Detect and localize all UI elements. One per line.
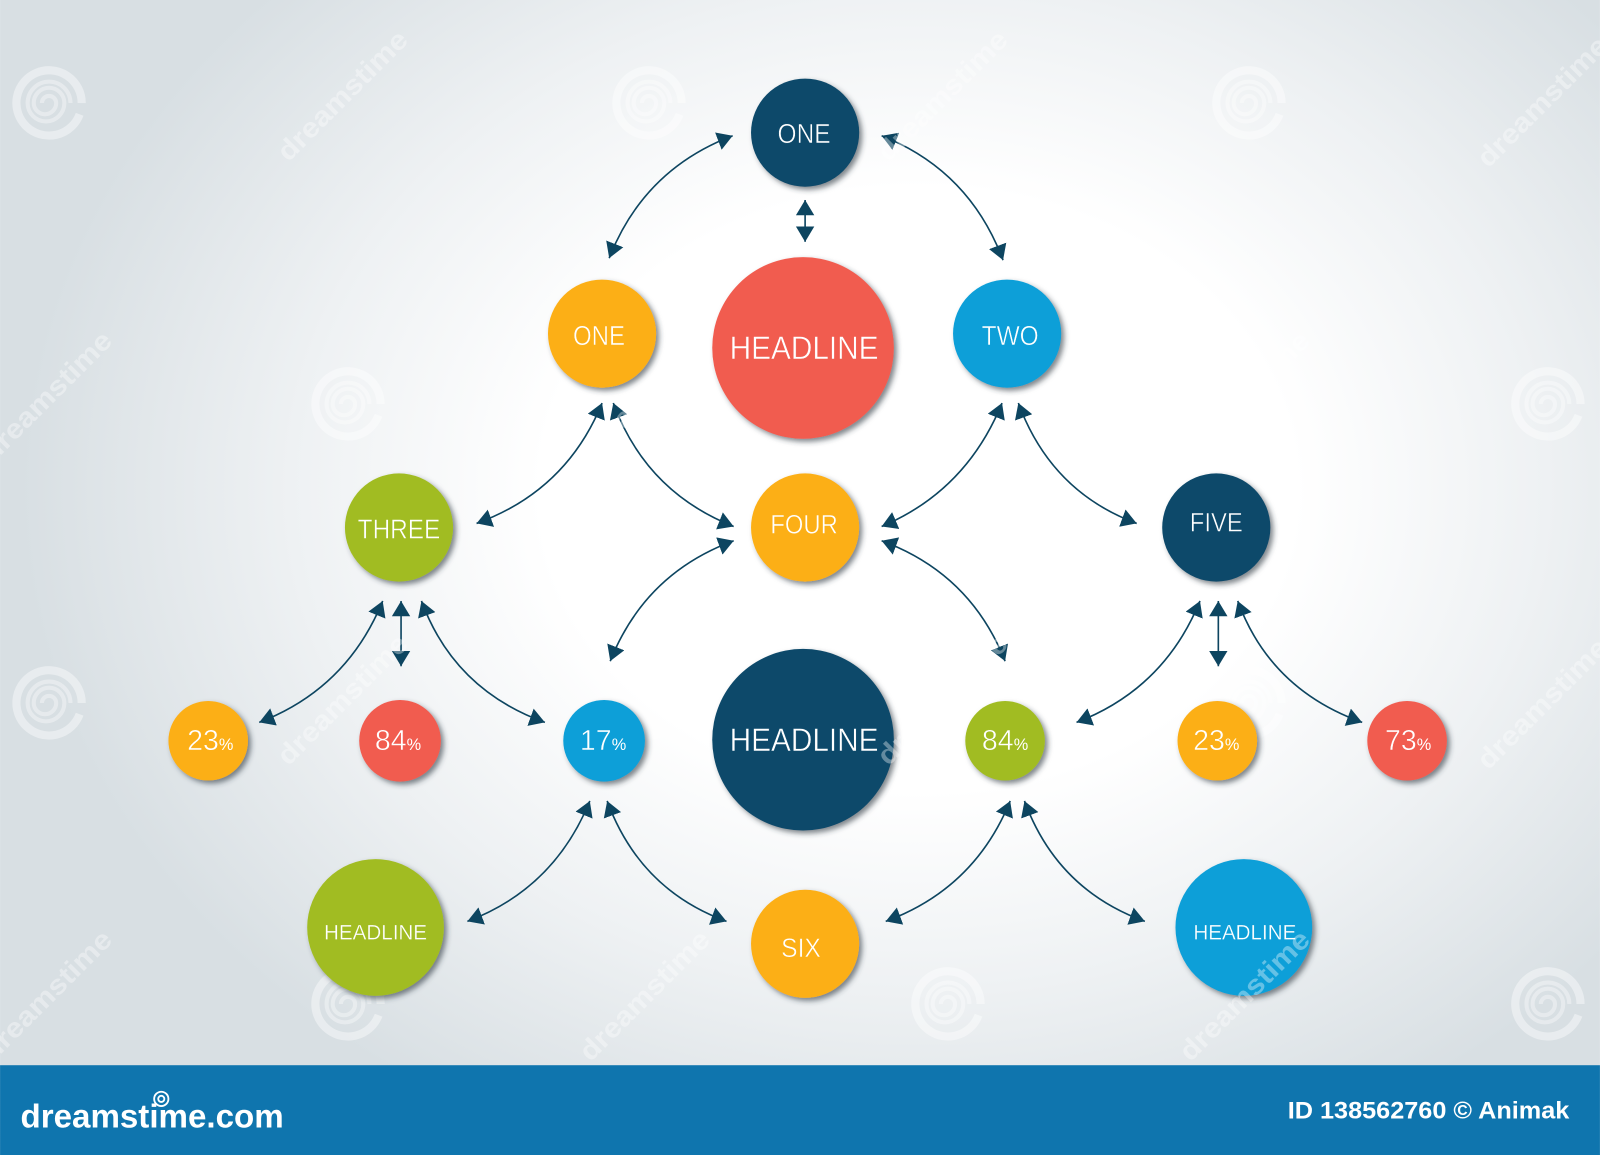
node: red headline <box>712 257 894 439</box>
watermark text: dreamstime <box>271 628 414 771</box>
node: top ONE: ONE <box>778 118 831 149</box>
node: FIVE <box>1162 473 1270 582</box>
arrow: 17 percent to green headline <box>467 801 590 921</box>
node: THREE <box>345 473 453 582</box>
footer logo spiral <box>154 1092 168 1106</box>
watermark text: dreamstime <box>871 24 1014 167</box>
arrow: FOUR to green 84 percent <box>882 541 1005 661</box>
node: top ONE <box>751 79 859 187</box>
node: yellow 23 percent: 23% <box>187 725 233 757</box>
watermark text: dreamstime <box>1173 924 1316 1067</box>
watermark text: dreamstime <box>573 924 716 1067</box>
node: green headline <box>307 859 444 996</box>
arrow: FOUR to 17 percent <box>610 541 734 661</box>
arrow: THREE to 17 percent <box>421 601 545 722</box>
node: TWO: TWO <box>982 320 1039 351</box>
node: blue 17 percent: 17% <box>580 725 626 757</box>
node: red 84 percent <box>359 700 441 782</box>
arrow: top ONE to TWO <box>882 136 1003 260</box>
watermark text: dreamstime <box>1471 632 1600 775</box>
node: blue 17 percent <box>563 700 645 782</box>
arrow: green 84 percent to SIX <box>886 801 1010 921</box>
node: yellow 23 percent right: 23% <box>1193 725 1239 757</box>
node: yellow ONE <box>548 280 656 388</box>
arrow: top ONE to yellow ONE <box>609 136 733 258</box>
node: red 73 percent <box>1367 701 1447 781</box>
node: blue headline <box>1175 859 1312 996</box>
node: SIX: SIX <box>781 933 821 963</box>
node: blue headline: HEADLINE <box>1193 921 1296 945</box>
footer image id and credit: ID 138562760 © Animak <box>1288 1097 1570 1124</box>
arrow: 17 percent to SIX <box>607 801 727 921</box>
node: red 84 percent: 84% <box>375 725 421 757</box>
arrow: FIVE to yellow 23 percent <box>1217 601 1219 666</box>
node: green 84 percent: 84% <box>982 725 1028 757</box>
node: red 73 percent: 73% <box>1385 725 1431 757</box>
node: dark headline: HEADLINE <box>730 721 879 758</box>
watermark text: dreamstime <box>1471 30 1600 173</box>
node: green headline: HEADLINE <box>324 921 427 945</box>
node: yellow ONE: ONE <box>573 320 625 351</box>
node: red headline: HEADLINE <box>730 329 879 366</box>
node: dark headline <box>712 649 894 831</box>
arrow: THREE to 23 percent <box>259 601 383 722</box>
node: yellow 23 percent <box>168 701 248 781</box>
watermark text: dreamstime <box>271 24 414 167</box>
footer bar <box>0 1065 1600 1155</box>
arrow: THREE to red 84 percent <box>400 601 402 666</box>
node: THREE: THREE <box>358 514 440 545</box>
arrow: yellow ONE to FOUR <box>613 403 734 526</box>
node: FOUR: FOUR <box>770 510 838 540</box>
node: SIX <box>751 890 859 998</box>
arrow: TWO to FIVE <box>1018 403 1137 523</box>
node: TWO <box>953 280 1061 388</box>
arrow: yellow ONE to THREE <box>477 403 602 523</box>
watermark text: dreamstime <box>573 325 716 468</box>
arrow: TWO to FOUR <box>882 403 1002 526</box>
arrow: FIVE to green 84 percent <box>1077 601 1200 722</box>
footer logo text: dreamstime.com <box>20 1098 284 1135</box>
node: FIVE: FIVE <box>1190 508 1243 538</box>
node: green 84 percent <box>965 701 1045 781</box>
watermark text: dreamstime <box>1173 325 1316 468</box>
watermark text: dreamstime <box>871 628 1014 771</box>
arrow: top ONE to red headline <box>804 200 806 242</box>
arrow: green 84 percent to blue headline <box>1024 801 1145 921</box>
arrow: FIVE to 73 percent <box>1238 601 1362 722</box>
node: FOUR <box>751 473 859 582</box>
node: yellow 23 percent right <box>1178 701 1257 781</box>
